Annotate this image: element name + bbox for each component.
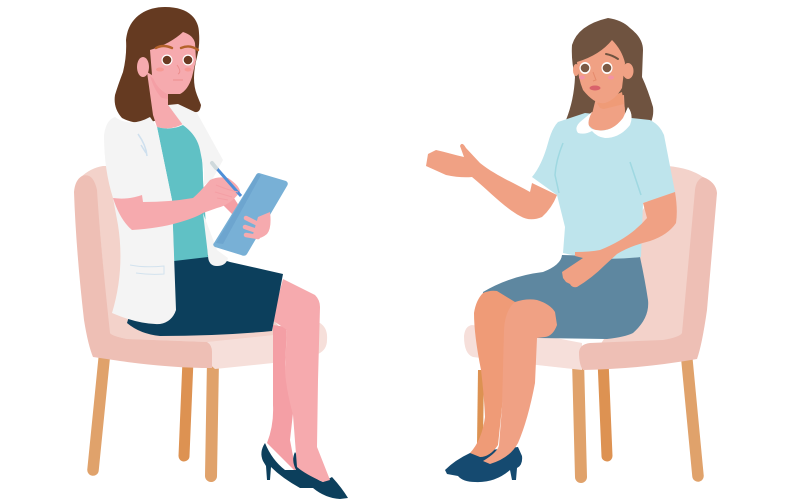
doctor shoe front bbox=[293, 452, 348, 499]
patient skirt bbox=[482, 255, 648, 339]
doctor leg back bbox=[267, 325, 296, 472]
doctor face bbox=[150, 32, 196, 94]
doctor ear bbox=[137, 57, 149, 77]
doctor skirt bbox=[127, 255, 283, 336]
doctor chin shadow bbox=[150, 76, 168, 99]
patient raised arm bbox=[426, 144, 557, 219]
doctor eyes bbox=[156, 46, 198, 80]
doctor shoe back bbox=[261, 443, 320, 488]
doctor leg front bbox=[272, 279, 330, 482]
doctor teal shirt bbox=[157, 125, 208, 261]
doctor lab coat bbox=[168, 104, 228, 266]
coat sleeve crease bbox=[138, 134, 147, 156]
doctor writing arm bbox=[113, 177, 240, 230]
doctor tablet hand bbox=[245, 212, 271, 238]
doctor neck bbox=[147, 72, 183, 128]
doctor hair bbox=[115, 7, 201, 123]
doctor bbox=[104, 7, 348, 499]
patient hair bbox=[566, 18, 653, 122]
clipboard bbox=[213, 173, 288, 256]
patient bbox=[426, 18, 677, 482]
patient collar bbox=[576, 107, 632, 138]
patient neck bbox=[587, 104, 625, 130]
coat pocket bbox=[130, 265, 164, 274]
patient back leg bbox=[470, 291, 515, 457]
patient shirt bbox=[532, 113, 675, 259]
patient eyes bbox=[579, 53, 618, 90]
patient shoes bbox=[445, 447, 522, 482]
doctor far arm bbox=[218, 195, 245, 222]
patient front leg bbox=[483, 299, 557, 464]
left chair bbox=[74, 166, 327, 476]
pencil bbox=[212, 163, 241, 196]
patient resting arm bbox=[562, 192, 677, 287]
doctor finger lines bbox=[215, 185, 238, 200]
shirt folds bbox=[555, 143, 641, 195]
right chair bbox=[464, 166, 717, 477]
patient face bbox=[573, 40, 634, 122]
